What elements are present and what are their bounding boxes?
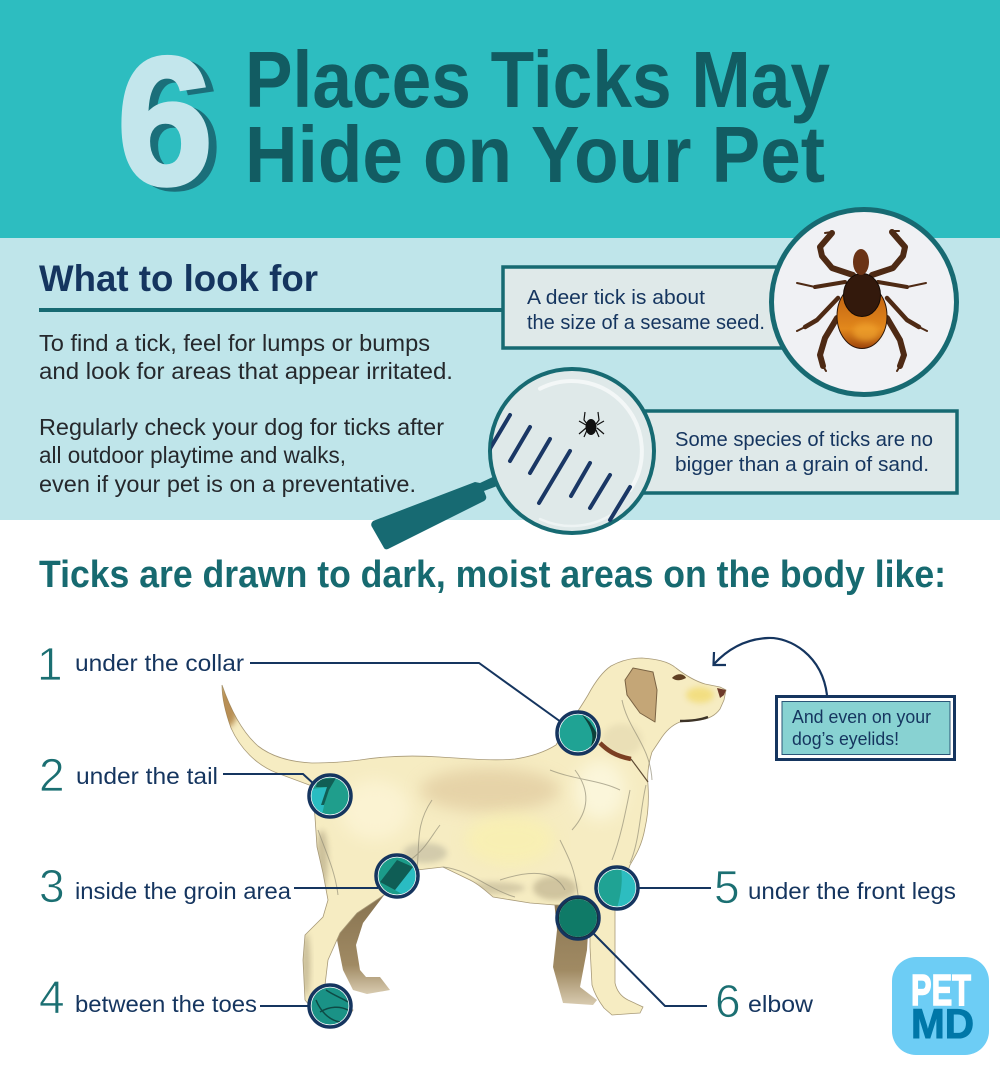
list item 1: [37, 638, 244, 690]
list item 6: elbow: [748, 991, 813, 1017]
logo: PetMD: PET: [911, 966, 971, 1015]
marker 1: under the collar: [557, 712, 599, 754]
list item 2: [39, 749, 218, 801]
icon: deer tick in circle: [772, 210, 956, 394]
body: [222, 658, 726, 1022]
intro text block: and look for areas that appear irritated.: [39, 358, 453, 384]
callout: deer tick size: [503, 267, 793, 348]
callout arrow to eyelid: [714, 638, 827, 695]
soft body shading: [218, 683, 714, 997]
list item 4: between the toes: [75, 991, 257, 1017]
intro text block: [39, 330, 453, 497]
list item 1: 1: [37, 638, 63, 690]
ear: [625, 668, 657, 722]
magnifier handle: [371, 475, 505, 549]
list item 5: 5: [714, 861, 740, 913]
callout: grain of sand: bigger than a grain of sand.: [675, 454, 929, 476]
illustration: dog: [218, 658, 726, 1022]
title line 2: Hide on Your Pet: [245, 110, 825, 199]
callout: eyelids: dog’s eyelids!: [792, 729, 899, 749]
intro text block: To find a tick, feel for lumps or bumps: [39, 330, 430, 356]
header band: [0, 0, 1000, 238]
list item 2: 2: [39, 749, 65, 801]
magnifier lens: [490, 369, 654, 533]
fur strokes: [318, 700, 652, 897]
callout: grain of sand: [641, 411, 957, 493]
logo: PetMD: [892, 957, 989, 1055]
heading rule: [39, 308, 504, 312]
callout: deer tick size: the size of a sesame seed.: [527, 312, 765, 334]
list item 6: 6: [715, 975, 741, 1027]
hair strokes: [488, 415, 630, 520]
list item 4: 4: [39, 971, 65, 1023]
list item 1: under the collar: [75, 650, 244, 676]
icon: magnifying glass: [371, 369, 654, 549]
list item 2: under the tail: [76, 763, 218, 789]
marker 4: between the toes: [309, 985, 351, 1027]
list item 6: [715, 975, 813, 1027]
list item 3: inside the groin area: [75, 878, 291, 904]
list item 5: [714, 861, 956, 913]
muzzle and mouth: [680, 717, 708, 721]
far hind leg: [336, 890, 390, 994]
callout: eyelids: And even on your: [792, 707, 931, 727]
title: [117, 19, 830, 227]
callout: grain of sand: Some species of ticks are no: [675, 429, 933, 451]
marker 2: under the tail: [308, 775, 351, 817]
list item 3: 3: [39, 860, 65, 912]
tiny tick: [579, 412, 604, 437]
collar: [600, 743, 631, 759]
intro text block: Regularly check your dog for ticks after: [39, 414, 444, 440]
marker 6: elbow: [557, 897, 599, 939]
big number 6: 6: [117, 19, 213, 223]
list item 3: [39, 860, 291, 912]
title line 1: Places Ticks May: [245, 35, 830, 124]
leader lines: [223, 663, 711, 1006]
heading: dark moist areas: Ticks are drawn to dark, moist areas on the body like:: [39, 554, 946, 596]
heading: what to look for: What to look for: [39, 258, 318, 299]
far front leg: [552, 880, 597, 1005]
list item 4: [39, 971, 257, 1023]
big number 6 shadow: 6: [125, 23, 221, 227]
marker 3: inside the groin area: [376, 855, 418, 897]
light section: what to look for: [0, 238, 1000, 520]
logo: PetMD: MD: [911, 1000, 974, 1047]
callout: eyelids: [776, 696, 954, 760]
callout: deer tick size: A deer tick is about: [527, 287, 705, 309]
list item 5: under the front legs: [748, 878, 956, 904]
intro text block: even if your pet is on a preventative.: [39, 471, 416, 497]
intro text block: all outdoor playtime and walks,: [39, 442, 346, 468]
marker 5: under the front legs: [596, 867, 638, 909]
